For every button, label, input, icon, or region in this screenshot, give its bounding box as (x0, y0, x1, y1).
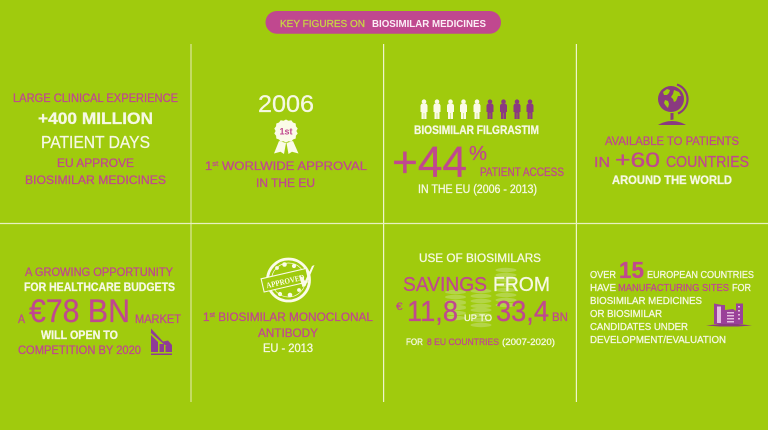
panel: monoclonal antibody (203, 259, 373, 355)
panel: manufacturing sites: HAVE (590, 282, 616, 294)
panel: manufacturing sites: FOR (732, 282, 751, 294)
panel: countries: IN (594, 154, 610, 171)
panel: growing opportunity: A GROWING OPPORTUNITY (25, 267, 173, 279)
panel: first approval: 2006 (258, 91, 314, 118)
panel: filgrastim patient access: BIOSIMILAR FILGRASTIM (414, 125, 539, 137)
panel: clinical experience: +400 MILLION (38, 109, 153, 128)
panel: savings: (2007-2020) (502, 337, 555, 348)
icon: falling bar chart (151, 328, 172, 355)
icon: approved stamp (261, 259, 314, 301)
icon: factory buildings (706, 304, 752, 326)
panel: filgrastim patient access: IN THE EU (2006 - 2013) (418, 184, 537, 196)
panel: savings: BN (552, 310, 568, 324)
panel: first approval (205, 91, 367, 190)
title pill: KEY FIGURES ON (280, 18, 365, 30)
panel: savings (396, 253, 568, 348)
icon: award rosette (274, 120, 298, 154)
panel: clinical experience: EU APPROVE (57, 158, 134, 170)
panel: countries: COUNTRIES (666, 154, 749, 171)
panel: savings: SAVINGS (403, 274, 487, 296)
panel: first approval: 1 (205, 159, 212, 173)
panel: manufacturing sites: CANDIDATES UNDER (590, 321, 688, 333)
panel: savings: FOR (406, 337, 423, 348)
panel: savings: 11,8 (407, 296, 458, 328)
title pill (266, 11, 501, 34)
panel: growing opportunity: FOR HEALTHCARE BUDGETS (24, 282, 175, 294)
panel: monoclonal antibody: ANTIBODY (258, 328, 318, 340)
panel: manufacturing sites: 15 (619, 257, 644, 283)
icon: row of people (420, 99, 534, 119)
panel: countries (594, 84, 749, 187)
panel: savings: FROM (493, 274, 550, 296)
panel: filgrastim patient access: PATIENT ACCESS (480, 167, 564, 179)
panel: first approval: WORLWIDE APPROVAL (218, 159, 367, 173)
panel: savings: € (396, 301, 402, 313)
panel: savings: 33,4 (496, 296, 549, 328)
panel: growing opportunity: WILL OPEN TO (41, 330, 118, 342)
panel: monoclonal antibody: EU - 2013 (263, 343, 313, 355)
panel: monoclonal antibody: 1 (203, 310, 210, 324)
panel: savings: 8 EU COUNTRIES (427, 337, 499, 348)
panel: first approval: IN THE EU (256, 178, 315, 190)
panel: growing opportunity: COMPETITION BY 2020 (18, 345, 141, 357)
panel: first approval: st (212, 161, 218, 168)
panel: growing opportunity: €78 BN (29, 293, 130, 329)
panel: filgrastim patient access (392, 99, 564, 196)
icon: approved stamp: APPROVED (265, 273, 306, 290)
panel: clinical experience: PATIENT DAYS (41, 132, 150, 152)
panel: savings: USE OF BIOSIMILARS (419, 253, 541, 265)
panel: clinical experience: LARGE CLINICAL EXPERIENCE (13, 93, 178, 105)
icon: award rosette: 1st (279, 126, 293, 136)
panel: savings: UP TO (464, 313, 492, 323)
panel: manufacturing sites: EUROPEAN COUNTRIES (647, 269, 754, 281)
title pill: BIOSIMILAR MEDICINES (372, 18, 486, 30)
panel: monoclonal antibody: st (210, 312, 215, 319)
panel: growing opportunity: A (18, 314, 25, 326)
panel: clinical experience (13, 93, 178, 187)
panel: clinical experience: BIOSIMILAR MEDICINES (25, 175, 166, 187)
panel: manufacturing sites (590, 257, 754, 346)
panel: filgrastim patient access: +44 (392, 138, 467, 187)
panel: manufacturing sites: OR BIOSIMILAR (590, 308, 662, 320)
panel: manufacturing sites: MANUFACTURING SITES (618, 282, 729, 294)
panel: countries: AVAILABLE TO PATIENTS (605, 136, 739, 148)
panel: growing opportunity: MARKET (135, 314, 181, 326)
panel: manufacturing sites: BIOSIMILAR MEDICINES (590, 295, 702, 307)
panel: monoclonal antibody: BIOSIMILAR MONOCLONAL (215, 310, 373, 324)
panel: manufacturing sites: DEVELOPMENT/EVALUATION (590, 334, 726, 346)
panel: growing opportunity (18, 267, 181, 357)
panel: manufacturing sites: OVER (590, 269, 616, 281)
panel: countries: AROUND THE WORLD (612, 175, 732, 187)
icon: globe (658, 84, 688, 125)
panel: filgrastim patient access: % (469, 143, 487, 165)
icon: coin stacks (445, 268, 516, 327)
panel: countries: +60 (615, 148, 660, 172)
